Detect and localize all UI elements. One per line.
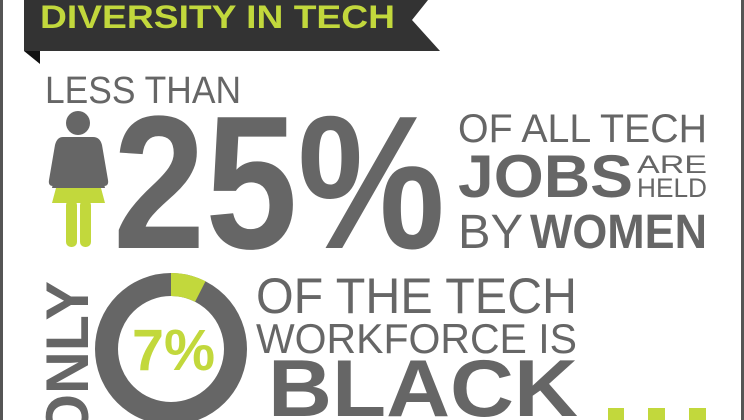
text block: of all tech jobs are held by women: WOMEN	[530, 206, 707, 259]
icon: woman	[49, 111, 108, 247]
text block: of the tech workforce is black	[256, 268, 578, 420]
donut label: 7%	[132, 318, 215, 383]
big number 25%: 25%	[113, 77, 445, 289]
donut chart 7%	[106, 284, 236, 414]
text block: of all tech jobs are held by women: BY	[458, 206, 523, 259]
text: less than: LESS THAN	[45, 70, 241, 112]
text block: of all tech jobs are held by women: OF ALL TECH	[458, 107, 707, 151]
text block: of all tech jobs are held by women: JOBS	[458, 143, 633, 210]
ellipsis dots	[608, 408, 706, 420]
text block: of the tech workforce is black: OF THE TECH	[256, 268, 577, 324]
text block: of all tech jobs are held by women: HELD	[637, 173, 707, 203]
text block: of the tech workforce is black: WORKFORCE IS	[256, 315, 577, 362]
text block: of all tech jobs are held by women	[458, 107, 707, 259]
title banner	[24, 0, 440, 64]
text block: of all tech jobs are held by women: ARE	[637, 151, 707, 179]
title: DIVERSITY IN TECH	[40, 0, 395, 35]
